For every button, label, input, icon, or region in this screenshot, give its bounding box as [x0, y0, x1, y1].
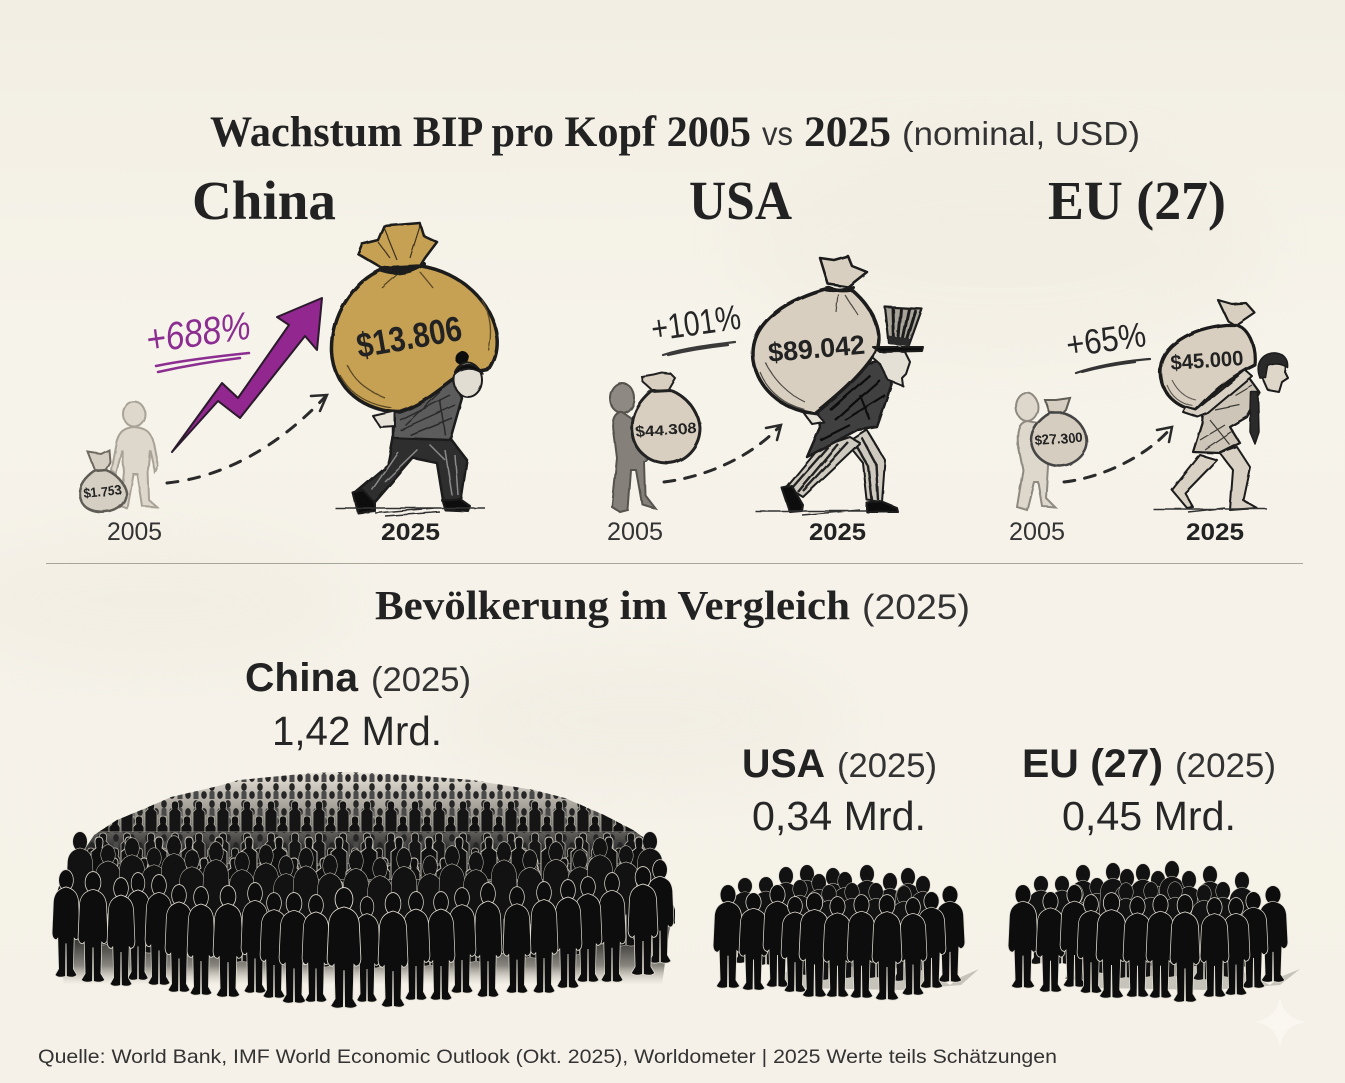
- bag: [332, 266, 497, 412]
- label: EU population: 0,45 Mrd.: [1062, 793, 1236, 839]
- crowd: EU: [1008, 861, 1300, 1002]
- label: EU population: (2025): [1175, 747, 1276, 785]
- sparkle watermark: [1255, 997, 1305, 1047]
- bag: [753, 288, 879, 414]
- dashed arrow: [664, 425, 781, 482]
- tunic: [1193, 375, 1260, 453]
- growth label +688%: +688%: [143, 305, 253, 362]
- bag value: $13.806: [354, 309, 465, 366]
- hat: [885, 307, 922, 345]
- heading: EU (27): EU (27): [1048, 170, 1226, 231]
- title: Wachstum BIP pro Kopf 2005: [210, 109, 751, 156]
- dashed arrow: [167, 395, 327, 483]
- hands: [373, 411, 395, 427]
- label: USA population: [742, 742, 937, 839]
- striped back leg: [847, 430, 885, 502]
- crowd: China: [40, 765, 690, 1008]
- heading: population comparison: Bevölkerung im Vergleich: [375, 582, 850, 628]
- title: (nominal, USD): [902, 115, 1140, 152]
- ground: [755, 510, 867, 515]
- label: USA population: (2025): [837, 747, 937, 785]
- label: EU population: [1022, 742, 1276, 839]
- label: USA population: USA: [742, 742, 825, 786]
- head: [1260, 355, 1288, 392]
- label: USA population: 0,34 Mrd.: [752, 793, 926, 839]
- label: EU population: EU (27): [1022, 742, 1163, 786]
- title: vs: [762, 115, 793, 152]
- year label 2005: 2005: [1009, 518, 1065, 546]
- figure 2005 with bag: $27.300: [1034, 430, 1083, 448]
- knot: [358, 223, 437, 268]
- arm: [1183, 370, 1252, 417]
- figure 2005 with bag: $44.308: [635, 420, 697, 441]
- face: [873, 350, 910, 386]
- year label 2025: 2025: [1186, 519, 1244, 546]
- knot: [820, 256, 867, 287]
- figure 2005 with small bag: [80, 402, 158, 512]
- legs: [1172, 455, 1217, 508]
- panel: USA GDP growth: [607, 256, 923, 546]
- title: [210, 109, 1140, 156]
- head: [455, 351, 469, 365]
- coat: [807, 361, 892, 457]
- figure 2025 with big bag and top hat: [753, 256, 923, 515]
- purple growth arrow: [172, 298, 322, 452]
- heading: China: China: [192, 170, 336, 231]
- panel: China GDP growth: [80, 223, 497, 546]
- dashed arrow: [1064, 427, 1172, 482]
- bag: [1160, 325, 1255, 410]
- tie: [1250, 392, 1259, 444]
- panel: EU GDP growth: [1009, 300, 1288, 546]
- ground: [335, 508, 485, 516]
- striped front leg: [787, 437, 860, 497]
- jacket: [393, 380, 462, 440]
- label: China population: (2025): [371, 661, 471, 699]
- legs: [355, 438, 467, 502]
- figure 2005 with bag: [610, 373, 700, 512]
- year label 2025: 2025: [381, 519, 440, 546]
- figure 2005 with small bag: $1.753: [83, 482, 123, 501]
- year label 2025: 2025: [809, 519, 866, 546]
- growth label +101%: +101%: [649, 298, 743, 349]
- crowd: USA: [713, 865, 979, 1000]
- figure 2025 with bag and tie: [1153, 300, 1288, 512]
- figure 2025 with gold money bag: [332, 223, 497, 516]
- knot: [1218, 300, 1255, 326]
- figure 2005 with bag: [1016, 393, 1087, 510]
- bag value: $45.000: [1170, 347, 1244, 375]
- ground: [1153, 508, 1267, 512]
- title: 2025: [804, 109, 891, 156]
- growth label +65%: +65%: [1064, 315, 1148, 365]
- heading: population comparison: (2025): [862, 588, 970, 627]
- label: China population: [245, 656, 471, 754]
- year label 2005: 2005: [607, 518, 663, 546]
- shoes: [782, 486, 898, 512]
- label: China population: China: [245, 656, 359, 700]
- year label 2005: 2005: [107, 518, 162, 546]
- label: China population: 1,42 Mrd.: [272, 708, 442, 754]
- bag value: $89.042: [767, 330, 866, 368]
- heading: USA: USA: [689, 170, 792, 231]
- source footnote: Quelle: World Bank, IMF World Economic Outlook (Okt. 2025), Worldometer | 2025 Werte teils Schätzungen: [38, 1046, 1057, 1068]
- shoes: [353, 490, 470, 513]
